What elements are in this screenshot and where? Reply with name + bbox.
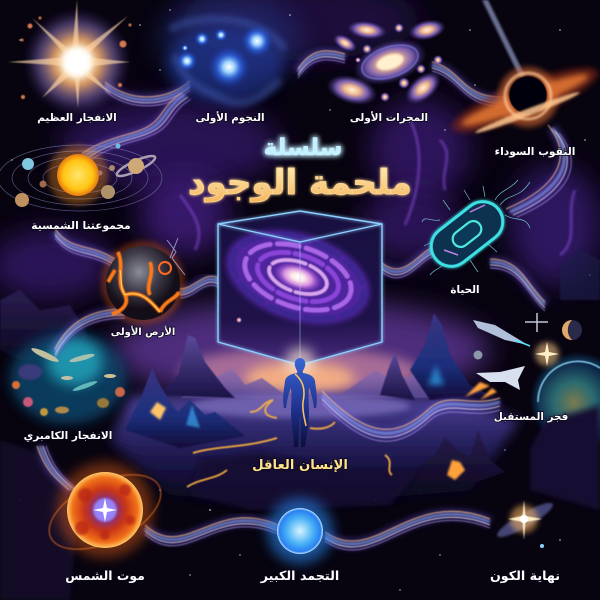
stream: early earth to cambrian [55,309,125,358]
stream: black hole to life [506,125,571,217]
stream: human to future [322,391,500,441]
icon: dying sun [38,459,172,565]
label: dawn of the future: فجر المستقبل [494,411,568,423]
icon: future ships and planets [465,313,600,510]
title: سلسلة [264,135,342,161]
icon: big bang [8,0,132,117]
stream: early earth to cube [180,276,220,298]
icon: cambrian sea [10,332,126,424]
icon: early earth [101,238,185,325]
icon: end of the universe [494,498,556,548]
label: cambrian explosion: الانفجار الكامبري [24,430,112,442]
stream: dying sun to big freeze [145,518,278,546]
stream: life to future [490,259,545,311]
stream: first stars to galaxies [298,51,345,78]
title [188,135,412,203]
label: death of the sun: موت الشمس [65,568,145,583]
label: big freeze: التجمد الكبير [260,568,339,583]
stream: big freeze to end of universe [325,511,490,550]
icon: big freeze star [267,498,333,564]
label: life: الحياة [450,284,480,296]
stream: galaxies to black hole [432,62,505,106]
label: first galaxies: المجرات الأولى [350,111,428,124]
label: solar system: مجموعتنا الشمسية [31,219,131,232]
label: early earth: الأرض الأولى [111,325,175,338]
nebula background [0,0,600,300]
label: big bang: الانفجار العظيم [37,112,117,124]
icon: black hole [446,0,600,144]
label: first stars: النجوم الأولى [195,111,265,124]
icon: bacterium [422,180,530,275]
landscape [0,250,600,600]
label: end of the universe: نهاية الكون [490,568,560,583]
icon: first galaxies [323,16,448,111]
stream: big bang to first stars [105,81,190,106]
label: homo sapiens: الإنسان العاقل [252,458,348,473]
label: black holes: الثقوب السوداء [495,145,575,158]
icon: solar system [0,144,162,211]
icon: human figure [283,347,317,447]
icon: cosmic cube [214,211,382,365]
stream: life to cube [382,247,435,278]
icon: first stars [167,19,285,103]
stream: solar system to early earth [55,229,115,268]
stream: first stars to solar system [82,93,191,160]
stream: cambrian to dying sun [37,446,78,490]
title: ملحمة الوجود [188,163,412,203]
